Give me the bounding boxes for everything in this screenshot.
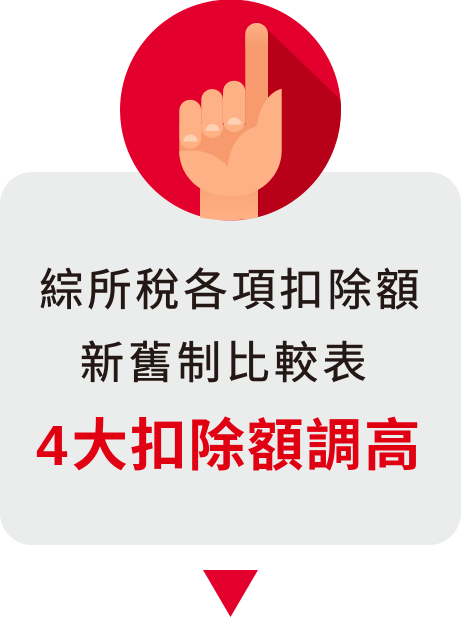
long shadow bbox=[258, 30, 345, 225]
panel: grey card bbox=[0, 172, 461, 545]
heading line 2: 新舊制比較表 bbox=[80, 339, 366, 388]
palm lower shading bbox=[200, 186, 258, 197]
wrist bbox=[200, 180, 258, 220]
pinky finger bbox=[179, 100, 201, 149]
arrow: down triangle bbox=[203, 570, 258, 617]
middle finger bbox=[223, 81, 245, 132]
icon: pointing hand on red circle bbox=[120, 0, 345, 225]
heading line 1: 綜所稅各項扣除額 bbox=[40, 266, 420, 315]
red circle bbox=[120, 0, 341, 220]
highlighted heading line 3: 4大扣除額調高 bbox=[36, 414, 420, 477]
palm and thumb bbox=[179, 89, 282, 197]
index finger bbox=[245, 23, 268, 148]
back of hand bbox=[179, 125, 259, 157]
ring finger bbox=[201, 89, 223, 138]
